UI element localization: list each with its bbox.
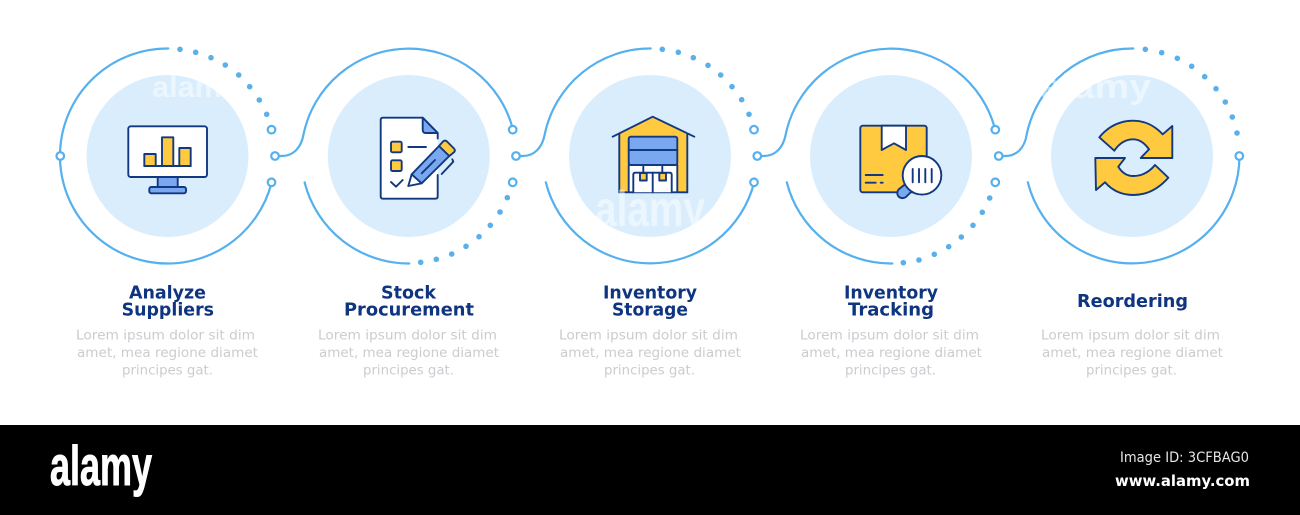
alamy logo: alamy <box>50 434 152 497</box>
ring nodes 1 <box>56 126 275 186</box>
title 4: Inventory <box>844 284 939 304</box>
description 1: amet, mea regione diamet <box>77 346 258 361</box>
dotted arc 2 <box>418 195 510 265</box>
description 3: principes gat. <box>604 364 695 378</box>
background disc 3 <box>569 75 731 237</box>
description 5: Lorem ipsum dolor sit dim <box>1041 328 1220 344</box>
description 4: principes gat. <box>845 364 936 378</box>
ring arcs 2 <box>279 49 513 264</box>
title 1: Suppliers <box>122 301 214 321</box>
background disc 5 <box>1051 75 1213 237</box>
step 5: reordering <box>995 46 1243 378</box>
title 3: Storage <box>612 301 688 321</box>
ring arcs 4 <box>761 49 995 264</box>
title 2: Procurement <box>344 301 474 321</box>
ring nodes 2 <box>271 126 516 186</box>
step 2: stock procurement <box>271 49 516 378</box>
icon: refresh arrows <box>1095 121 1172 195</box>
description 3: Lorem ipsum dolor sit dim <box>559 328 738 344</box>
description 2: Lorem ipsum dolor sit dim <box>318 328 497 344</box>
step 1: analyze suppliers <box>56 46 275 378</box>
description 5: principes gat. <box>1086 364 1177 378</box>
title 4: Tracking <box>848 301 934 321</box>
description 1: Lorem ipsum dolor sit dim <box>76 328 255 344</box>
watermark overlays <box>152 68 1151 237</box>
title 2: Stock <box>381 284 436 304</box>
dotted arc 1 <box>177 46 270 117</box>
website: www.alamy.com <box>1115 472 1250 490</box>
ring arcs 3 <box>520 48 754 263</box>
description 5: amet, mea regione diamet <box>1042 346 1223 361</box>
footer band <box>0 425 1300 515</box>
description 2: amet, mea regione diamet <box>319 346 499 361</box>
watermark overlays: alamy <box>595 181 705 237</box>
description 1: principes gat. <box>122 364 213 378</box>
description 4: Lorem ipsum dolor sit dim <box>800 328 979 344</box>
icon: checklist and pencil <box>381 118 455 199</box>
dotted arc 4 <box>900 195 992 266</box>
icon: monitor with bar chart <box>128 126 207 193</box>
watermark overlays: alam <box>152 71 222 104</box>
step 4: inventory tracking <box>754 49 999 379</box>
ring nodes 3 <box>512 126 758 186</box>
title 3: Inventory <box>603 284 698 304</box>
background disc 4 <box>810 75 972 237</box>
description 2: principes gat. <box>363 364 454 378</box>
ring nodes 4 <box>754 126 999 186</box>
background disc 1 <box>86 75 248 237</box>
step 3: inventory storage <box>512 46 758 378</box>
ring arc 1 <box>60 48 272 263</box>
background disc 2 <box>328 75 490 237</box>
dotted arc 5 <box>1142 46 1240 136</box>
title 5: Reordering <box>1077 292 1188 312</box>
ring nodes 5 <box>995 152 1243 160</box>
title 1: Analyze <box>129 284 206 304</box>
description 3: amet, mea regione diamet <box>560 346 741 361</box>
ring arcs 5 <box>1002 48 1240 263</box>
description 4: amet, mea regione diamet <box>801 346 982 361</box>
icon: parcel and barcode magnifier <box>860 126 941 198</box>
image id: Image ID: 3CFBAG0 <box>1120 450 1249 466</box>
watermark overlays: alamy <box>1040 68 1151 106</box>
dotted arc 3 <box>660 46 752 117</box>
icon: warehouse <box>613 117 694 192</box>
